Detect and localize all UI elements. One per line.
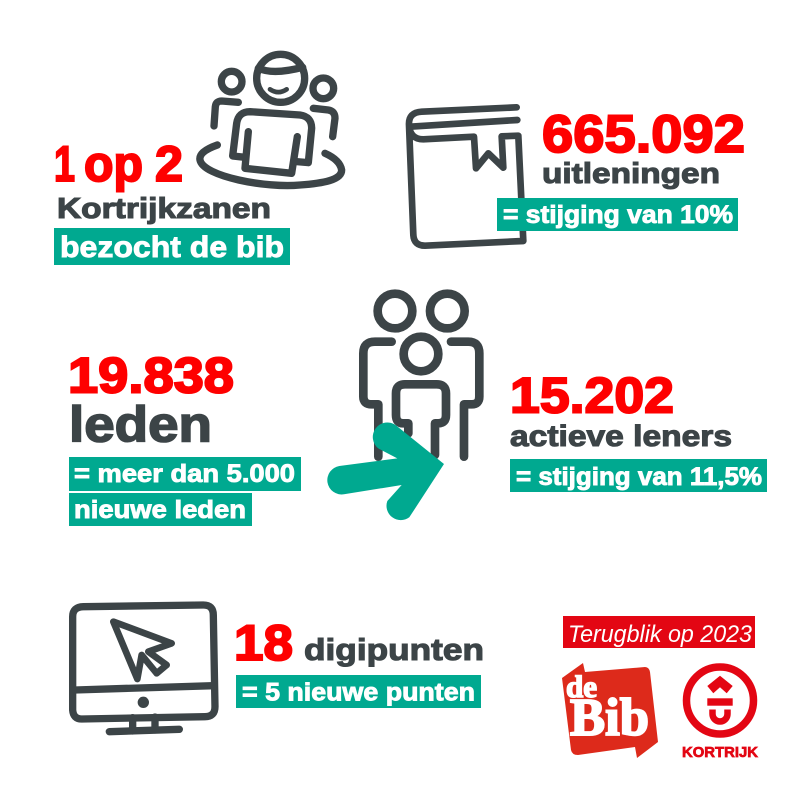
text: actieve leners: actieve leners (510, 420, 732, 453)
statistic: 1 op 2: op (84, 136, 143, 192)
statistic: 1 op 2: 1 (54, 136, 75, 192)
text: Kortrijkzanen: Kortrijkzanen (57, 193, 271, 225)
logo: de Bib: de (566, 669, 597, 704)
label: meer dan 5.000: = meer dan 5.000 (74, 460, 295, 488)
logo: Kortrijk (682, 667, 758, 761)
statistic: 15.202: 15.202 (510, 368, 674, 424)
statistic: 665.092: 665.092 (542, 105, 745, 164)
statistic: 1 op 2: 2 (155, 136, 183, 192)
text: digipunten: digipunten (304, 632, 484, 667)
icon: book (409, 107, 523, 246)
icon: family of three (363, 294, 479, 457)
text: leden: leden (69, 396, 212, 452)
label: stijging van 11,5%: = stijging van 11,5% (516, 463, 762, 491)
logo: Kortrijk: KORTRIJK (682, 744, 758, 761)
label: nieuwe leden: nieuwe leden (74, 496, 246, 524)
icon: group of people around a circle (200, 54, 342, 186)
arrow: teal pointing right (327, 422, 444, 520)
logo: de Bib: Bib (570, 689, 649, 747)
label: bezocht de bib: bezocht de bib (60, 231, 284, 264)
logo: de Bib (562, 663, 658, 758)
statistic: 18: 18 (234, 615, 293, 671)
label: 5 nieuwe punten: = 5 nieuwe punten (242, 678, 475, 706)
banner: Terugblik op 2023: Terugblik op 2023 (568, 621, 753, 648)
label: stijging van 10%: = stijging van 10% (503, 201, 733, 229)
text: uitleningen: uitleningen (542, 158, 720, 190)
statistic: 19.838: 19.838 (68, 348, 234, 404)
icon: monitor with cursor (73, 605, 215, 732)
